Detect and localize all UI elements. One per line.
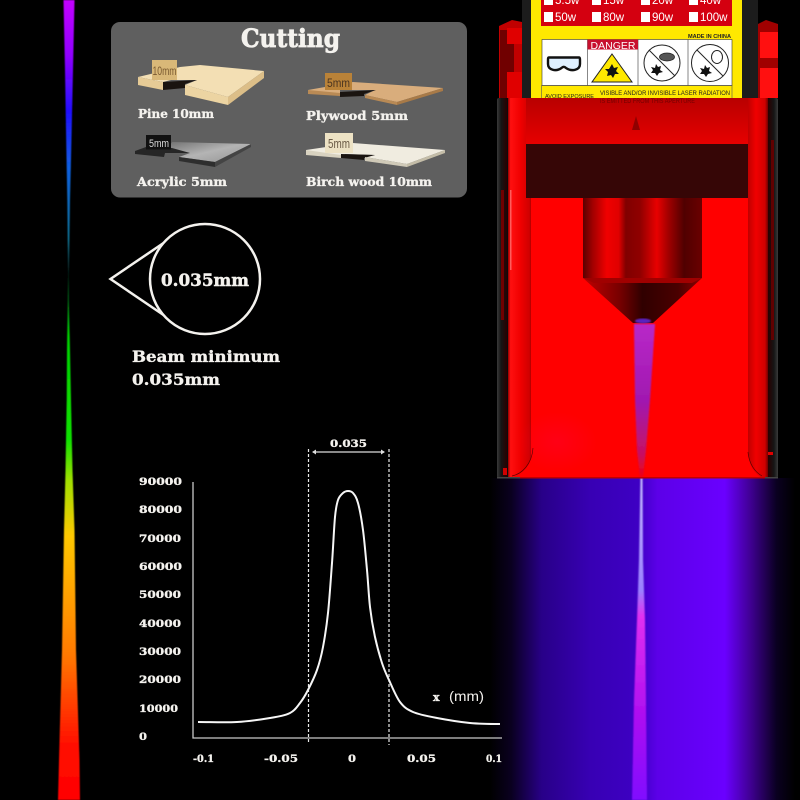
x axis labels: 0.1	[486, 753, 502, 765]
upper side blocks	[499, 0, 778, 100]
text: beam minimum: 0.035mm	[132, 370, 220, 389]
dark band	[526, 144, 748, 198]
sample: plywood 5mm	[306, 73, 443, 123]
y axis labels: 0	[139, 731, 147, 743]
y axis labels: 90000	[139, 476, 182, 488]
beam inside cover	[634, 324, 655, 478]
y axis labels: 40000	[139, 618, 181, 630]
y axis labels: 10000	[139, 703, 178, 715]
laser head	[497, 0, 778, 478]
x axis labels: 0	[348, 753, 356, 765]
danger header: DANGER	[590, 41, 636, 52]
intensity curve	[198, 491, 500, 724]
text: beam minimum: Beam minimum	[132, 347, 281, 366]
sample: birch wood 10mm	[306, 133, 445, 189]
y axis labels: 80000	[139, 504, 182, 516]
axes	[193, 482, 502, 738]
violet glow below laser head	[490, 478, 795, 800]
yellow warning label: MADE IN CHINA	[688, 34, 731, 40]
x axis unit: (mm)	[449, 688, 484, 704]
text: beam minimum	[132, 347, 281, 389]
sample: plywood 5mm: 5mm	[327, 76, 350, 90]
sample: acrylic 5mm: 5mm	[149, 138, 169, 150]
icon: no eye exposure	[644, 45, 680, 81]
icon: goggles	[548, 58, 580, 70]
x axis unit: x	[433, 691, 440, 704]
panel: cutting samples	[111, 22, 467, 198]
beam spot diagram: 0.035mm	[161, 271, 249, 291]
x axis unit	[433, 688, 484, 704]
sample: plywood 5mm: Plywood 5mm	[306, 108, 408, 123]
icon: no hand exposure	[692, 44, 728, 82]
sample: birch wood 10mm: Birch wood 10mm	[306, 174, 432, 189]
yellow warning label	[531, 0, 742, 106]
y axis labels: 30000	[139, 646, 181, 658]
wattage box	[541, 0, 732, 26]
y axis labels	[139, 476, 182, 743]
nozzle	[583, 198, 702, 324]
wattage box: 50w	[555, 12, 577, 24]
rainbow spectrum strip	[58, 0, 80, 800]
warning strip text: AVOID EXPOSURE	[545, 94, 594, 100]
y axis labels: 20000	[139, 674, 181, 686]
x axis labels: 0.05	[407, 753, 436, 765]
label text seen through cover: IS EMITTED FROM THIS APERTURE	[600, 99, 695, 105]
warning strip text: VISIBLE AND/OR INVISIBLE LASER RADIATION	[600, 91, 730, 97]
sample: acrylic 5mm	[135, 135, 251, 189]
translucent red cover	[497, 98, 778, 478]
x axis labels: -0.1	[193, 753, 214, 765]
violet laser beam	[632, 478, 647, 800]
x axis labels: -0.05	[264, 753, 298, 765]
wattage box: 80w	[603, 12, 625, 24]
x axis labels	[193, 753, 502, 765]
wattage box: 100w	[700, 12, 728, 24]
wattage box: 90w	[652, 12, 674, 24]
beam spot diagram	[110, 224, 260, 334]
sample: pine 10mm	[138, 60, 264, 121]
icon: laser warning triangle	[592, 54, 632, 82]
dimension arrow 0.035	[312, 439, 385, 454]
sample: pine 10mm: 10mm	[152, 64, 176, 78]
y axis labels: 60000	[139, 561, 182, 573]
warning strip text	[542, 86, 732, 106]
sample: pine 10mm: Pine 10mm	[138, 106, 214, 121]
y axis labels: 50000	[139, 589, 181, 601]
warning cells	[542, 40, 732, 86]
sample: acrylic 5mm: Acrylic 5mm	[136, 174, 227, 189]
chart: beam intensity profile	[139, 439, 502, 765]
heading: Cutting: Cutting	[241, 24, 340, 53]
sample: birch wood 10mm: 5mm	[328, 136, 350, 151]
cover bottom edge	[497, 477, 778, 478]
y axis labels: 70000	[139, 533, 181, 545]
dimension arrow 0.035: 0.035	[330, 439, 367, 450]
